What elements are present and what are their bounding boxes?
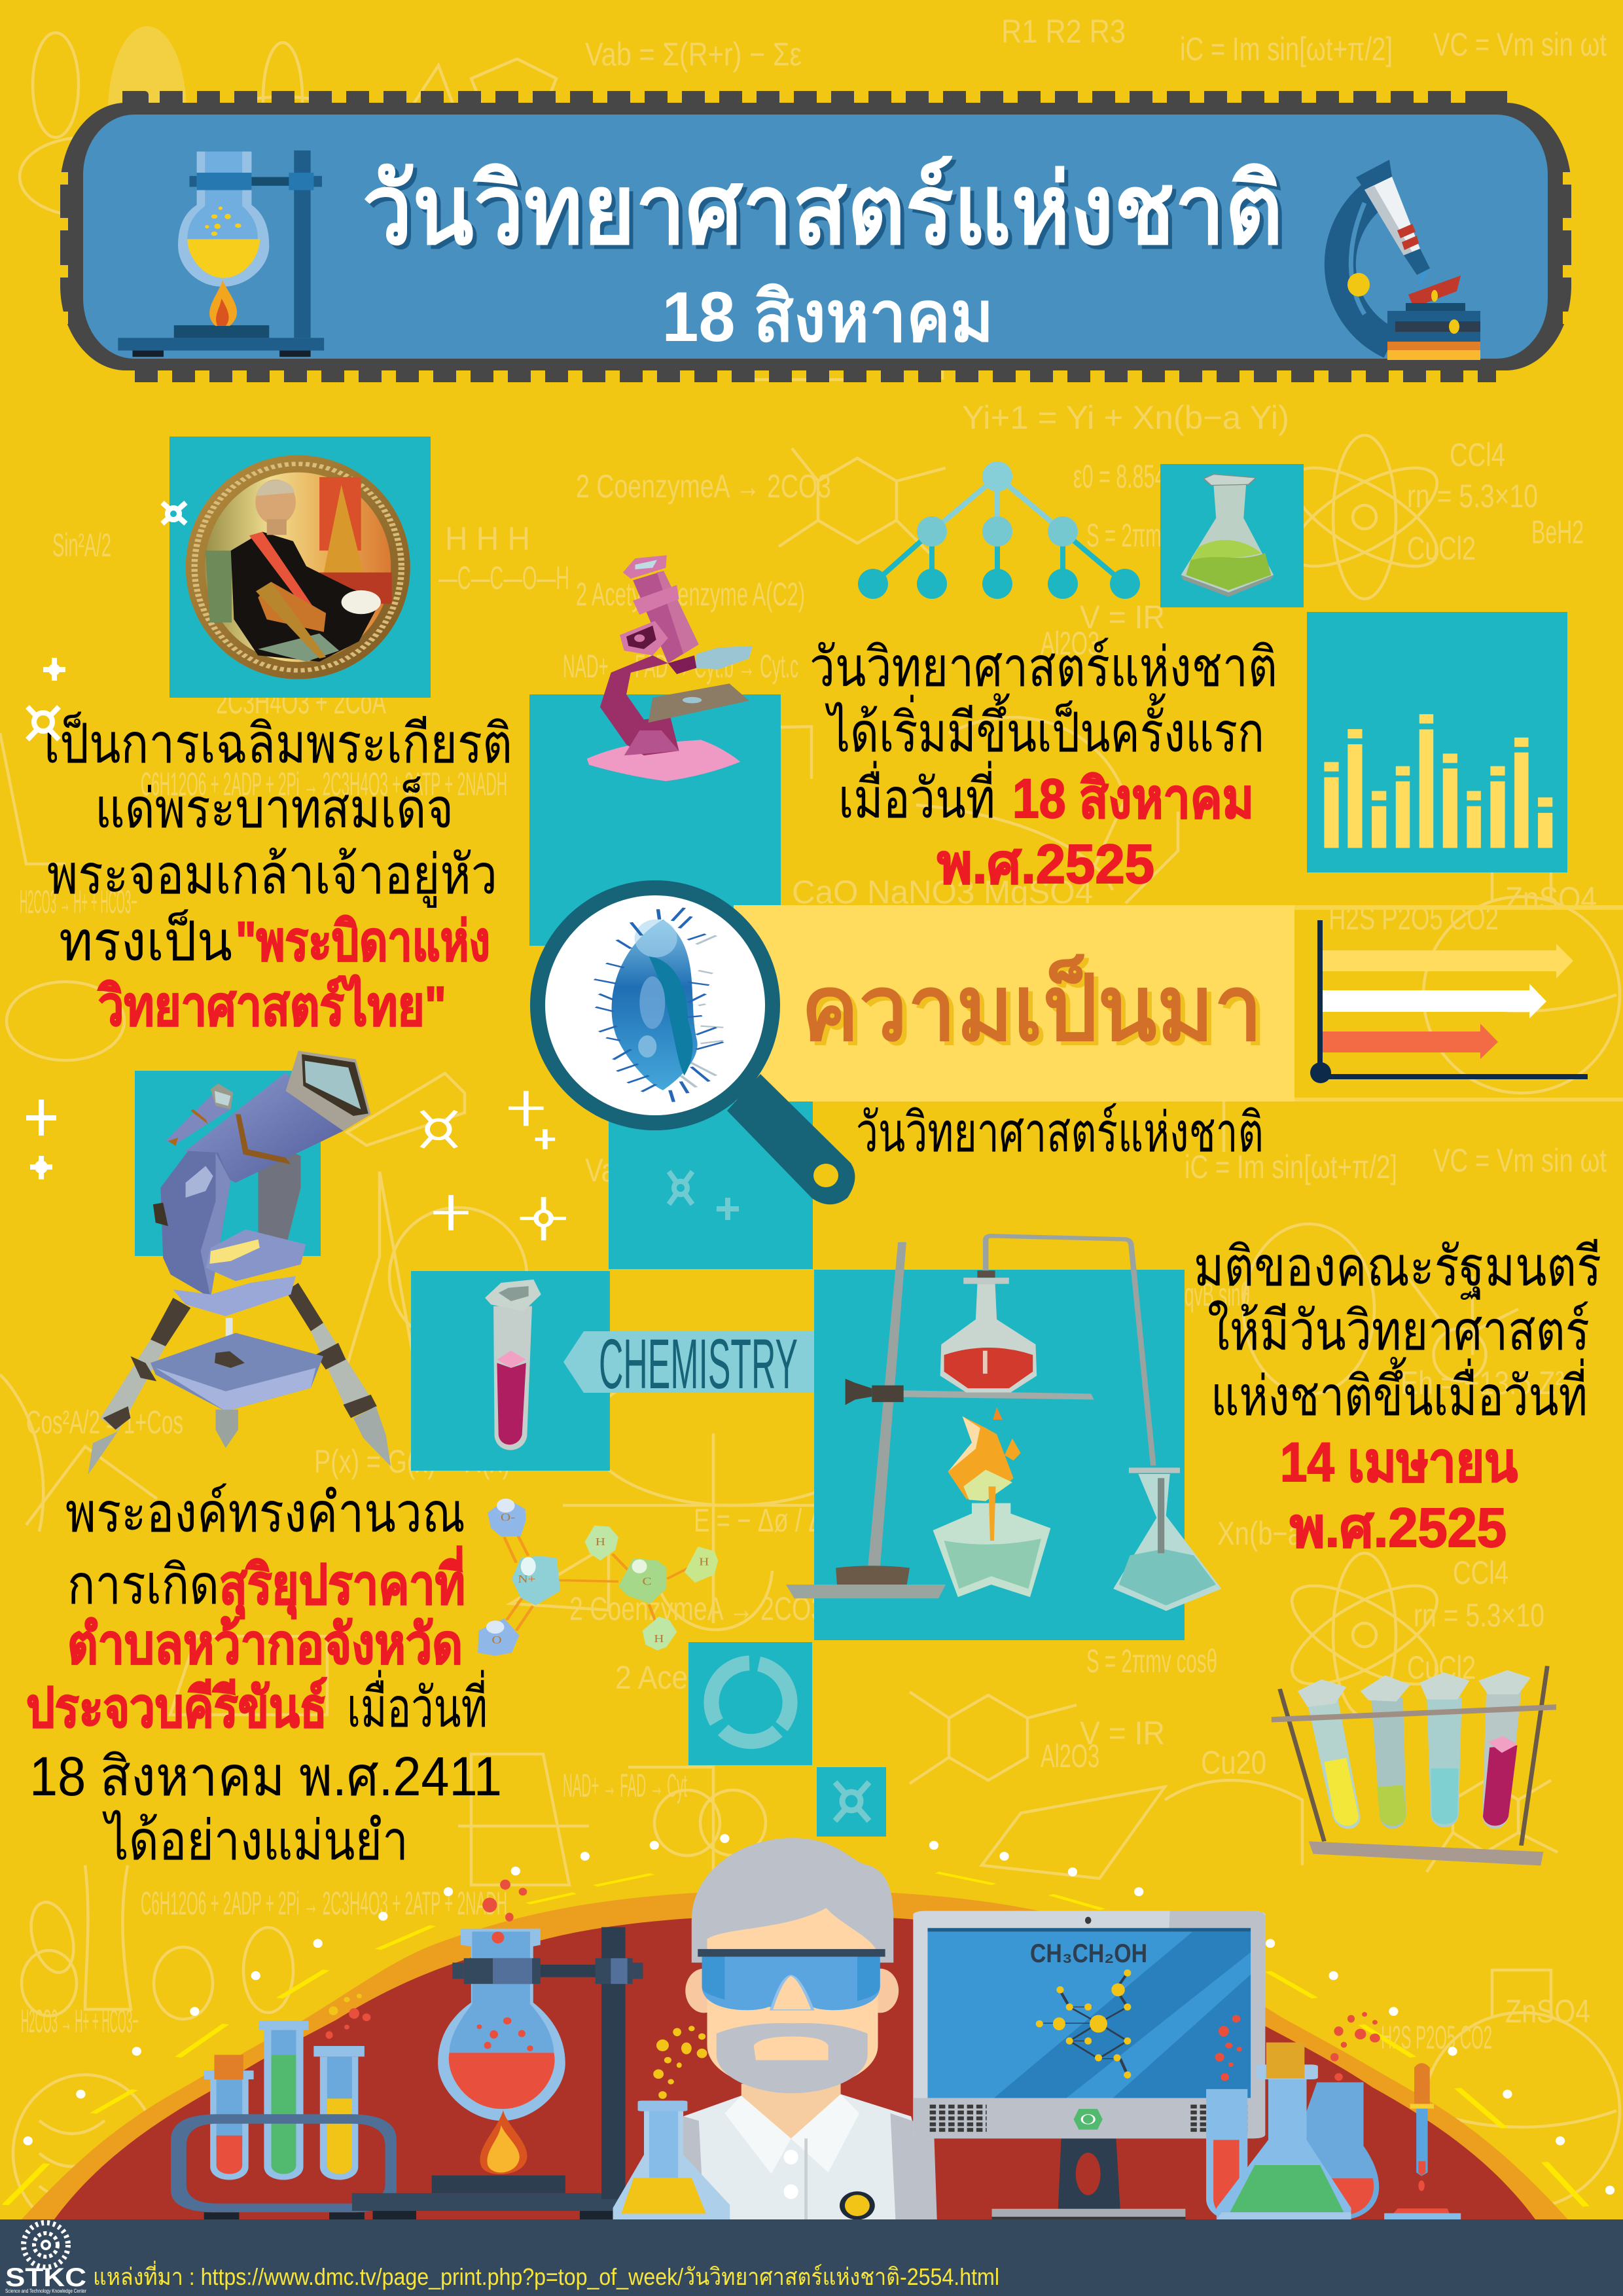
background doodles: CaO NaNO3 MgSO4 xyxy=(792,874,1093,910)
background doodles: Al2O3 xyxy=(1041,1738,1099,1774)
scene: scientist and equipment xyxy=(171,1838,1461,2219)
background doodles: 2 CoenzymeA → 2CO3 xyxy=(569,1590,825,1627)
panel: green flask xyxy=(1160,464,1304,607)
subtitle date: 18 สิงหาคม xyxy=(662,277,993,356)
scientist figure xyxy=(662,1838,937,2219)
background doodles: Vab = Σ(R+r) − Σε xyxy=(585,1152,802,1189)
molecule on screen xyxy=(1039,1973,1128,2075)
logo: STKC: Science and Technology Knowledge Center xyxy=(5,2288,86,2294)
background doodles: H2CO3 → H+ + HCO3− xyxy=(20,884,137,920)
left text: intro: แด่พระบาทสมเด็จ xyxy=(95,776,454,839)
background doodles: NAD+ → FAD → Cyt.b → Cyt.c xyxy=(563,648,798,685)
background doodles: Xn(b−a xyxy=(1217,1515,1302,1552)
icon: x star xyxy=(835,1782,869,1821)
right text: first held: 18 สิงหาคม xyxy=(1012,768,1254,829)
icon: flask on burner xyxy=(118,151,324,357)
icon: molecule xyxy=(478,1499,718,1656)
microscope backdrop xyxy=(529,694,781,946)
right text: cabinet resolution: 14 เมษายน xyxy=(1280,1431,1518,1493)
left text: eclipse: เมื่อวันที่ xyxy=(347,1670,488,1738)
background doodles: CuCl2 xyxy=(1407,530,1476,567)
source line: แหล่งที่มา : https://www.dmc.tv/page_print.php?p=top_of_week/วันวิทยาศาสตร์แห่งชาติ-2554.html xyxy=(93,2261,999,2290)
left text: intro: วิทยาศาสตร์ไทย" xyxy=(97,975,446,1037)
right text: first held: พ.ศ.2525 xyxy=(937,833,1154,895)
background doodles: CCl4 xyxy=(1450,437,1505,473)
chart backdrop xyxy=(1307,612,1567,872)
background doodles: Cos²A/2 = 1+Cos xyxy=(26,1404,183,1441)
flask backdrop xyxy=(1160,464,1304,607)
footer bar xyxy=(0,2219,1623,2296)
icon: magnifier with bacterium xyxy=(530,880,855,1204)
round flask on stand xyxy=(352,1880,643,2219)
apparatus backdrop xyxy=(814,1270,1185,1640)
background doodles: rn = 5.3×10 xyxy=(1414,1597,1544,1634)
right text: cabinet resolution: พ.ศ.2525 xyxy=(1290,1497,1507,1558)
white sparkle icons xyxy=(26,503,186,1179)
tube backdrop xyxy=(411,1271,610,1471)
portrait backdrop xyxy=(169,437,431,698)
tree diagram xyxy=(858,461,1140,599)
arrow chart xyxy=(1310,920,1588,1083)
frame notches xyxy=(59,172,1572,324)
left text: eclipse: สุริยุปราคาที่ xyxy=(219,1546,465,1619)
magnifier ring xyxy=(530,880,780,1130)
panel: cycle block xyxy=(688,1642,812,1765)
test tubes in rack xyxy=(171,1994,397,2219)
right text: first held: วันวิทยาศาสตร์แห่งชาติ xyxy=(810,636,1277,698)
background doodles: H2CO3 → H+ + HCO3− xyxy=(21,2003,139,2039)
background doodles: V = IR xyxy=(1080,1715,1165,1751)
background doodles: ε0 = 8.8542×10 xyxy=(1073,458,1211,495)
banner panel xyxy=(83,115,1548,359)
left text: eclipse: 18 สิงหาคม พ.ศ.2411 xyxy=(29,1746,502,1807)
panel: portrait of King Mongkut xyxy=(169,437,431,698)
atom nodes: O- xyxy=(501,1512,515,1524)
background doodles: Eh = −13.6 Z² xyxy=(1400,1365,1564,1401)
yellow flask xyxy=(613,2026,730,2219)
band outline xyxy=(1294,905,1623,910)
tubes xyxy=(1298,1670,1531,1829)
chemistry label: CHEMISTRY xyxy=(599,1324,798,1403)
computer monitor xyxy=(913,1911,1265,2219)
background doodles: C6H12O6 + 2ADP + 2Pi → 2C3H4O3 + 2ATP + 2NADH xyxy=(141,1885,507,1922)
left text: eclipse: ประจวบคีรีขันธ์ xyxy=(26,1677,327,1738)
background doodles: E = − Δø / Δt xyxy=(694,1502,831,1539)
icon: test tube rack xyxy=(1272,1666,1556,1865)
logo emblem xyxy=(24,2223,68,2267)
right text: first held: ได้เริ่มมีขึ้นเป็นครั้งแรก xyxy=(825,693,1264,763)
telescope backdrop xyxy=(135,1071,321,1256)
atom nodes: O xyxy=(491,1634,502,1646)
title banner xyxy=(59,91,1572,376)
left text: eclipse: ตำบลหว้ากอจังหวัด xyxy=(67,1613,463,1675)
background doodles: Sin²A/2 xyxy=(52,527,111,564)
heading band: ความเป็นมา xyxy=(801,955,1262,1060)
background doodles: CuCl2 xyxy=(1407,1649,1476,1686)
background doodles: rn = 5.3×10 xyxy=(1407,478,1538,514)
chemistry label xyxy=(563,1324,814,1403)
bars xyxy=(1324,714,1552,848)
atom nodes xyxy=(478,1499,718,1656)
background doodles: iC = Im sin[ωt+π/2] xyxy=(1180,31,1393,67)
panel: small x block xyxy=(817,1767,886,1837)
background doodles: 2 Acetyl C xyxy=(615,1659,746,1696)
heading text: ความเป็นมา xyxy=(806,959,1267,1064)
panel: microscope block xyxy=(529,555,781,946)
background doodles: CCl4 xyxy=(1453,1554,1508,1591)
logo: STKC xyxy=(5,2223,86,2294)
background doodles: iC = Im sin[ωt+π/2] xyxy=(1185,1149,1397,1185)
bacterium xyxy=(594,908,723,1102)
title text: วันวิทยาศาสตร์แห่งชาติ xyxy=(366,158,1287,268)
icon: green flask xyxy=(1181,475,1274,597)
arc decoration dots and dashes xyxy=(5,1834,1614,2206)
atom nodes: H xyxy=(596,1536,605,1548)
background doodles: Yi+1 = Yi + Xn(b−a Yi) xyxy=(962,399,1289,436)
title banner: วันวิทยาศาสตร์แห่งชาติ xyxy=(363,154,1283,264)
right text: cabinet resolution xyxy=(1194,1236,1601,1558)
icon: faint stars xyxy=(669,1172,739,1220)
banner frame xyxy=(60,91,1571,376)
left text: intro: พระจอมเกล้าเจ้าอยู่หัว xyxy=(47,844,497,908)
panel: teal block under magnifier xyxy=(609,1102,813,1269)
white sparkle icons group xyxy=(422,1091,566,1240)
icon: cycle ring xyxy=(711,1663,790,1742)
band fill xyxy=(734,905,1294,1102)
speaker grilles xyxy=(930,2107,1247,2130)
icon: test tube xyxy=(485,1280,541,1450)
background doodles: P(x) = G(x) + R(x) xyxy=(314,1443,510,1480)
right text: first held: เมื่อวันที่ xyxy=(838,761,995,829)
background doodles: R1 R2 R3 xyxy=(1001,13,1126,50)
left text: eclipse: พระองค์ทรงคำนวณ xyxy=(65,1482,465,1543)
panel: bar chart xyxy=(1307,612,1567,872)
atom nodes: H xyxy=(699,1556,709,1568)
background doodles: 2 Acetyl Coenzyme A(C2) xyxy=(576,576,805,613)
icon: telescope xyxy=(88,1051,391,1475)
background doodles: H2S P2O5 CO2 xyxy=(1329,900,1499,937)
icon: microscope xyxy=(1340,160,1480,360)
magnifier handle xyxy=(727,1074,855,1204)
right glassware xyxy=(1206,2012,1461,2219)
background doodles: V = IR xyxy=(1080,599,1165,636)
background doodles: BeH2 xyxy=(1531,514,1584,550)
dropper xyxy=(1414,2063,1430,2104)
caption under band: วันวิทยาศาสตร์แห่งชาติ xyxy=(856,1102,1264,1163)
background doodles: Cu20 xyxy=(1201,1744,1266,1781)
panel: telescope xyxy=(88,1051,391,1475)
apparatus drawing xyxy=(786,1236,1222,1611)
left text: intro xyxy=(44,711,512,1037)
laboratory dome xyxy=(22,1890,1568,2219)
background doodles: NAD+ → FAD → Cyt xyxy=(563,1767,687,1804)
background doodles: ZnSO4 xyxy=(1505,1993,1590,2030)
background doodles: Al2O3 xyxy=(1041,625,1099,662)
left text: eclipse: การเกิด xyxy=(67,1554,219,1615)
atom nodes: N+ xyxy=(518,1573,535,1585)
atom nodes: H xyxy=(654,1633,664,1645)
icon: pink microscope xyxy=(587,555,753,781)
background doodles: 2 CoenzymeA → 2CO3 xyxy=(576,468,831,505)
heading band xyxy=(734,905,1623,1102)
portrait painting xyxy=(186,455,410,679)
background doodles: C6H12O6 + 2ADP + 2Pi → 2C3H4O3 + 2ATP + 2NADH xyxy=(141,766,507,802)
background doodles: H H H xyxy=(445,520,530,557)
background doodles: 2C3H4O3 + 2CoA xyxy=(216,684,386,721)
right text: first held xyxy=(810,636,1277,895)
background doodles: —C—C—O—H xyxy=(438,560,569,596)
chemical formula on screen: CH₃CH₂OH xyxy=(1030,1939,1147,1968)
left text: eclipse xyxy=(26,1482,502,1871)
background doodles: ZnSO4 xyxy=(1505,880,1597,917)
background doodles: Vab = Σ(R+r) − Σε xyxy=(585,36,802,73)
left text: intro: "พระบิดาแห่ง xyxy=(236,910,490,972)
background doodles: S = 2πmv cosθ xyxy=(1086,1643,1217,1679)
power button xyxy=(1074,2109,1103,2130)
left text: eclipse: ได้อย่างแม่นยำ xyxy=(102,1810,408,1871)
left text: intro: เป็นการเฉลิมพระเกียรติ xyxy=(44,711,512,774)
left text: intro: ทรงเป็น xyxy=(59,909,232,972)
background doodles: S = 2πmv cosθ xyxy=(1086,517,1217,554)
panel: test tube xyxy=(411,1271,610,1471)
atom nodes: C xyxy=(642,1576,652,1588)
logo: STKC: STKC xyxy=(5,2263,86,2292)
background doodles: qvB sinθ xyxy=(1185,1276,1250,1313)
background doodles: H2S P2O5 CO2 xyxy=(1381,2019,1492,2056)
panel: chemistry apparatus xyxy=(786,1236,1222,1640)
